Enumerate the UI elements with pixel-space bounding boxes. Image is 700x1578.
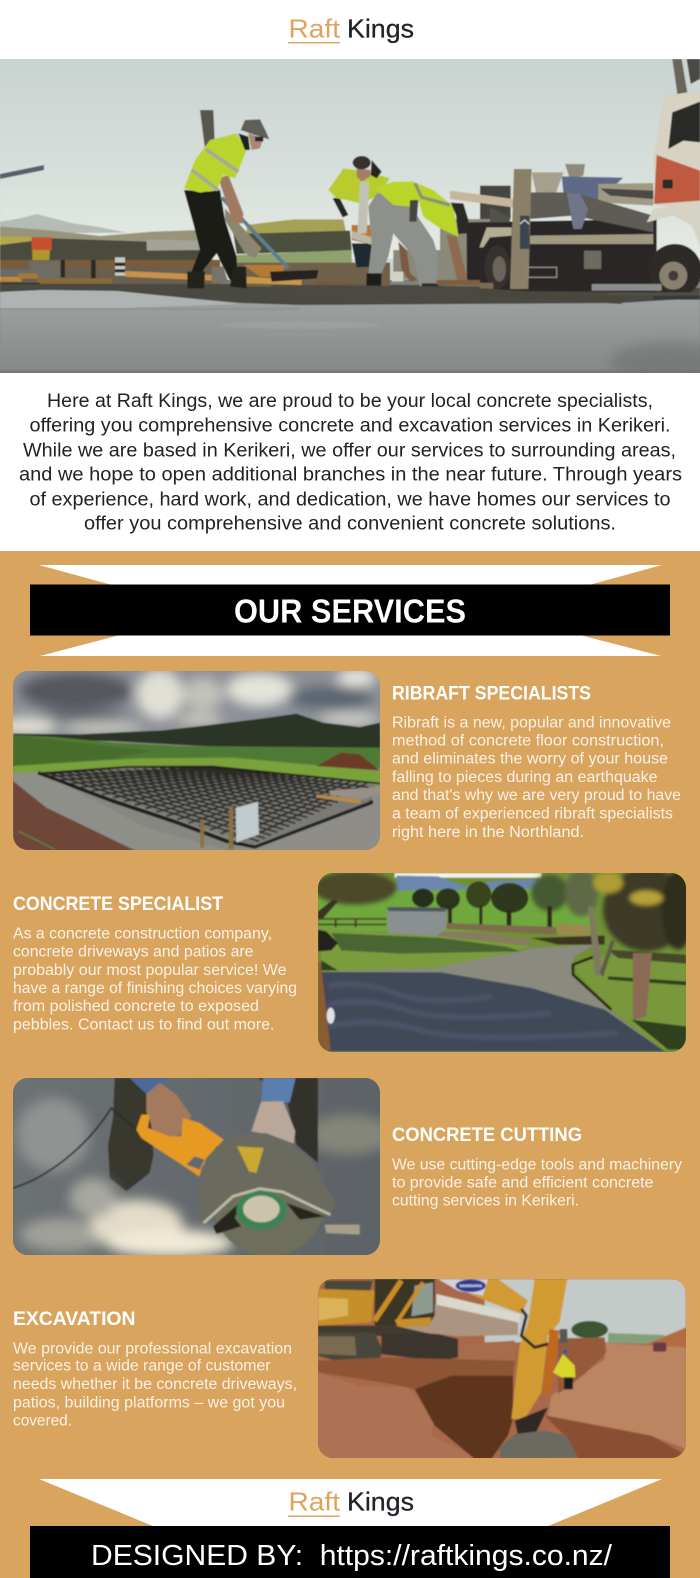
text: concrete cutting description: to provide safe and efficient concrete: [392, 1174, 654, 1191]
footer bar: designed by: [30, 1526, 670, 1578]
text: ribraft description: and that's why we are very proud to have: [392, 787, 681, 804]
banner: our services: OUR SERVICES: [234, 593, 466, 630]
logo: Raft Kings footer: [288, 1486, 414, 1517]
intro paragraph: While we are based in Kerikeri, we offer our services to surrounding areas,: [23, 440, 676, 461]
intro paragraph: of experience, hard work, and dedication, we have homes our services to: [30, 489, 670, 510]
logo: Raft Kings footer: Raft: [288, 1486, 341, 1516]
icon: Samsung badge on excavator boom: SAMSUNG: [459, 1284, 482, 1288]
page background white: [0, 0, 700, 551]
text: ribraft description: right here in the Northland.: [392, 824, 584, 841]
text: concrete specialist description: As a concrete construction company,: [13, 925, 272, 942]
intro paragraph: [19, 391, 682, 535]
logo: Raft Kings header: Kings: [347, 14, 414, 44]
text: concrete specialist description: [13, 925, 297, 1033]
heading: excavation: EXCAVATION: [13, 1308, 136, 1330]
text: excavation description: patios, building platforms – we got you: [13, 1394, 285, 1411]
photo: excavator and trench: [318, 1279, 686, 1459]
orange services background: [0, 551, 700, 1578]
text: ribraft description: Ribraft is a new, popular and innovative: [392, 715, 671, 732]
footer bar: designed by: DESIGNED BY: https://raftkings.co.nz/: [91, 1540, 613, 1572]
intro paragraph: and we hope to open additional branches in the near future. Through years: [19, 465, 682, 486]
text: concrete cutting description: [392, 1156, 682, 1210]
logo: Raft Kings header: Raft: [288, 14, 341, 44]
text: concrete specialist description: pebbles. Contact us to find out more.: [13, 1016, 274, 1033]
photo: concrete cutting saw: [13, 1078, 393, 1257]
text: concrete specialist description: probably our most popular service! We: [13, 962, 286, 979]
photo: concrete driveway: [313, 868, 695, 1053]
text: ribraft description: method of concrete floor construction,: [392, 732, 664, 749]
intro paragraph: Here at Raft Kings, we are proud to be your local concrete specialists,: [47, 391, 653, 412]
text: ribraft description: and eliminates the worry of your house: [392, 750, 668, 768]
text: excavation description: We provide our professional excavation: [13, 1340, 292, 1357]
footer logo ribbon: [39, 1479, 662, 1526]
text: ribraft description: [392, 715, 681, 841]
text: ribraft description: a team of experienced ribraft specialists: [392, 806, 673, 822]
text: concrete cutting description: cutting services in Kerikeri.: [392, 1193, 579, 1210]
concrete workers: [184, 110, 480, 304]
text: concrete specialist description: have a range of finishing choices varying: [13, 980, 297, 997]
photo: ribraft foundation: [0, 669, 380, 851]
heading: concrete specialist: CONCRETE SPECIALIST: [13, 893, 223, 915]
hero background: landscape and site boards: [0, 214, 220, 292]
text: excavation description: needs whether it be concrete driveways,: [13, 1376, 297, 1393]
heading: concrete cutting: CONCRETE CUTTING: [392, 1124, 582, 1146]
text: excavation description: covered.: [13, 1413, 72, 1430]
text: excavation description: services to a wide range of customer: [13, 1358, 270, 1375]
text: excavation description: [13, 1340, 297, 1430]
text: concrete specialist description: from polished concrete to exposed: [13, 998, 259, 1015]
truck and pump rig: [440, 59, 700, 304]
hero photo: workers pouring concrete: [0, 59, 700, 382]
banner: our services: [30, 565, 670, 656]
intro paragraph: offer you comprehensive and convenient concrete solutions.: [84, 514, 616, 535]
logo: Raft Kings footer: Kings: [347, 1486, 414, 1516]
intro paragraph: offering you comprehensive concrete and excavation services in Kerikeri.: [30, 416, 670, 437]
text: concrete specialist description: concrete driveways and patios are: [13, 944, 254, 961]
text: concrete cutting description: We use cutting-edge tools and machinery: [392, 1156, 682, 1173]
icon: Samsung badge on excavator boom: [456, 1279, 486, 1292]
logo: Raft Kings header: [288, 14, 414, 44]
heading: ribraft specialists: RIBRAFT SPECIALISTS: [392, 682, 591, 704]
text: ribraft description: falling to pieces during an earthquake: [392, 769, 658, 786]
